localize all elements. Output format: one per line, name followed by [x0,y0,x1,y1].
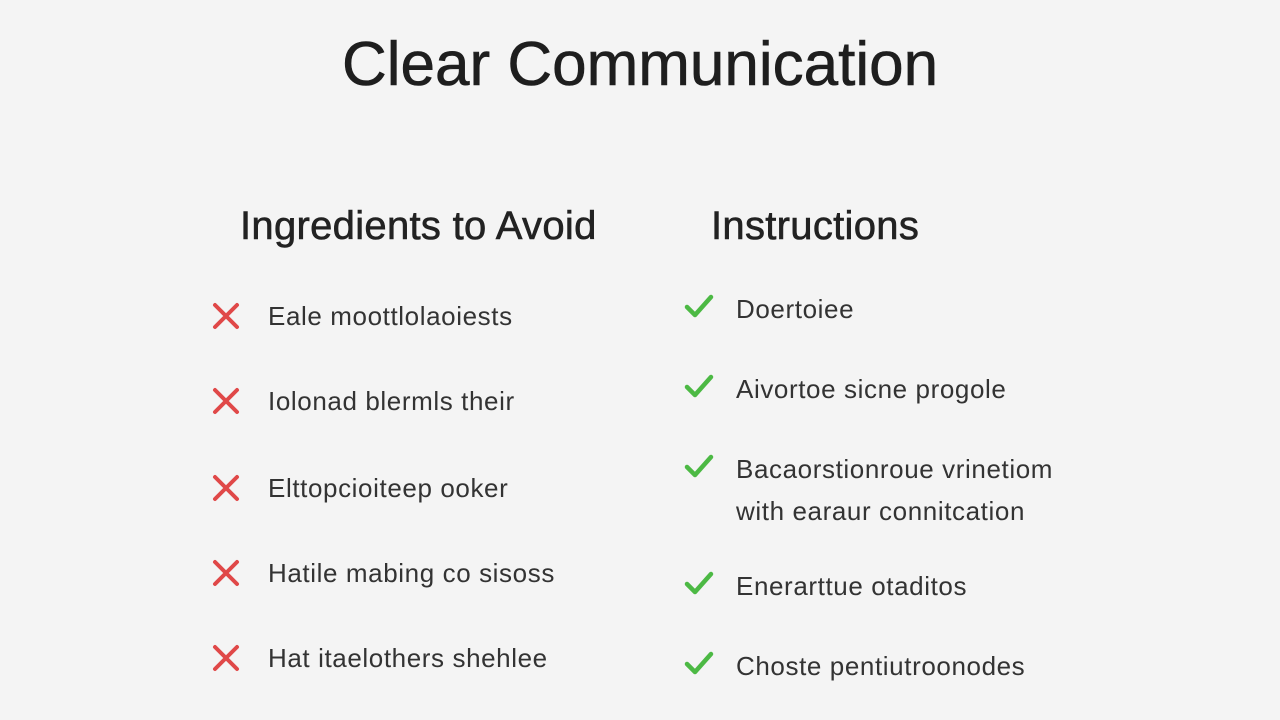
item 3: Elttopcioiteep ooker [268,473,508,503]
item 5: Choste pentiutroonodes [736,651,1025,681]
item 2: Aivortoe sicne progole [736,374,1006,404]
item 3 [684,454,1053,526]
heading: instructions: Instructions [711,204,919,248]
panel: instructions [684,204,1053,681]
heading: ingredients to avoid: Ingredients to Avoid [240,204,597,248]
item 4: Hatile mabing co sisoss [268,558,555,588]
item 1: Doertoiee [736,294,854,324]
item 1 [684,294,854,324]
title: Clear Communication [342,30,938,99]
item 5: Hat itaelothers shehlee [268,643,548,673]
item 3: Bacaorstionroue vrinetiom [736,454,1053,484]
item 2: Iolonad blermls their [268,386,515,416]
item 4: Enerarttue otaditos [736,571,967,601]
panel: ingredients to avoid [212,204,597,673]
item 3: with earaur connitcation [736,496,1025,526]
item 1: Eale moottlolaoiests [268,301,513,331]
